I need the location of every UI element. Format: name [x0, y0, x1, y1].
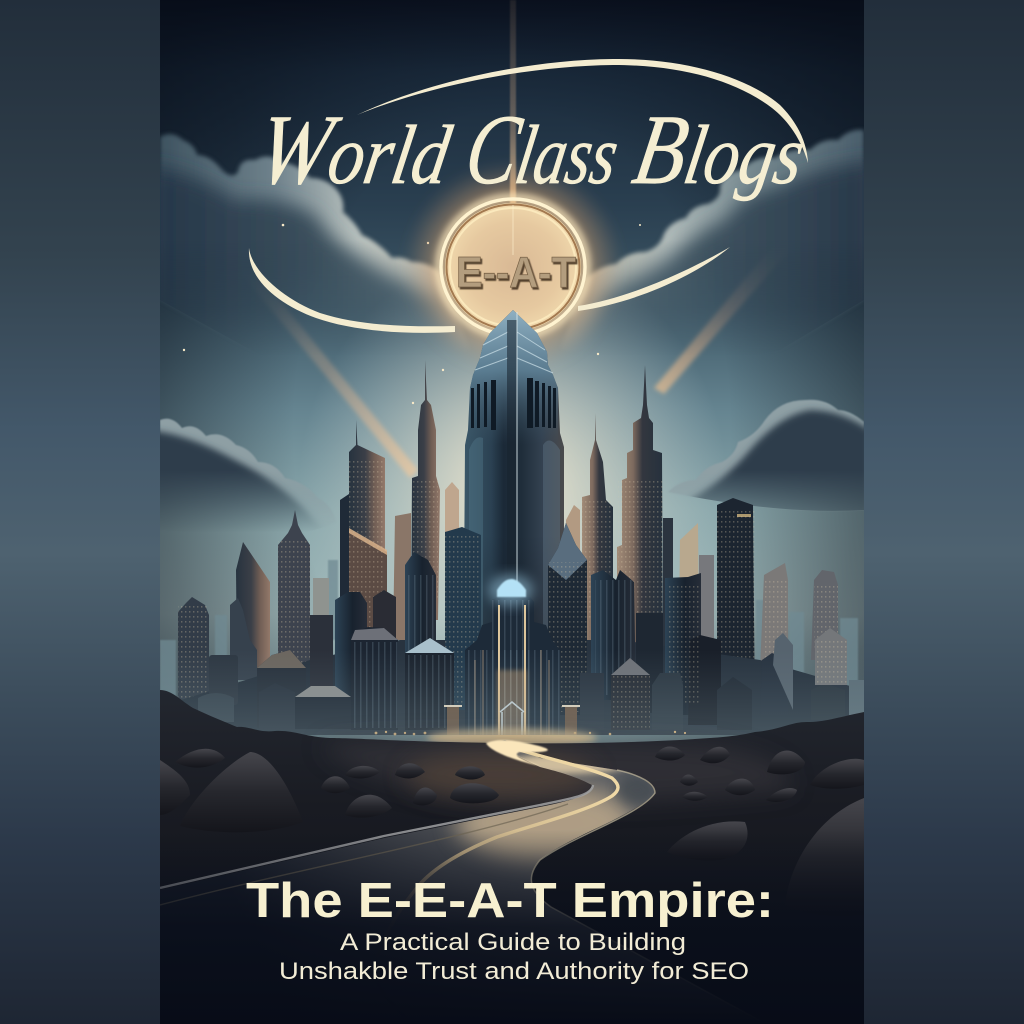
rocks	[160, 747, 864, 916]
mid-ground towers	[310, 523, 793, 725]
main title: The E-E-A-T Empire:	[246, 874, 774, 928]
poster cover	[160, 0, 864, 1024]
subtitle line two: Unshakble Trust and Authority for SEO	[279, 958, 749, 985]
upper right cloud	[566, 128, 864, 344]
brand script title: Class	[458, 94, 628, 205]
glowing entrance building	[427, 574, 597, 747]
right side panel	[864, 0, 1024, 1024]
left side panel	[0, 0, 160, 1024]
road right edge	[531, 770, 766, 1024]
foreground low buildings	[198, 627, 864, 730]
sky background	[160, 0, 864, 1024]
tower facade slits	[471, 378, 556, 430]
road centre line	[375, 750, 618, 1024]
distant hazy skyline	[160, 560, 858, 713]
ring emblem	[403, 161, 623, 373]
top swash	[357, 59, 808, 163]
city backing mass	[165, 640, 864, 735]
lower left cloud	[160, 418, 317, 528]
lower left swash	[249, 248, 455, 333]
brand script title: World	[250, 94, 460, 205]
bottom shadow	[160, 830, 864, 1024]
brand script title	[250, 94, 814, 205]
lower right cloud	[670, 399, 864, 511]
back towers	[178, 360, 838, 720]
winding road	[160, 739, 696, 986]
road glow at the city gate	[486, 740, 548, 766]
ground with grass and rocks	[160, 690, 864, 1024]
sparkles	[183, 224, 641, 404]
sky vignette	[160, 0, 864, 1024]
brand script title: Blogs	[626, 94, 814, 205]
atmospheric haze over city base	[160, 650, 864, 735]
lower right swash	[578, 247, 730, 311]
diagonal light rays	[232, 225, 804, 478]
upper left cloud	[160, 132, 463, 338]
central tower	[463, 310, 564, 730]
subtitle line one: A Practical Guide to Building	[340, 929, 686, 956]
city lights	[375, 731, 686, 735]
horizon glow	[298, 250, 728, 730]
ring emblem label: E--A-T	[456, 248, 576, 297]
vertical light beam	[510, 0, 516, 215]
